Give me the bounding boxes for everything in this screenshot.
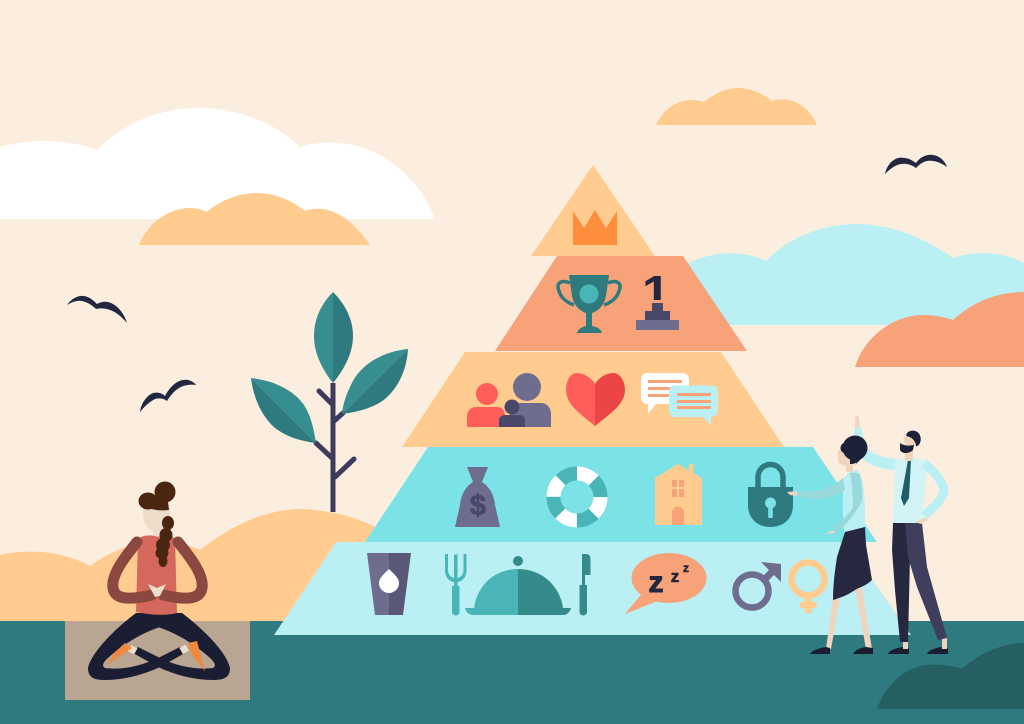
icon: sleep speech bubble xyxy=(625,553,706,614)
plant stem and branches xyxy=(316,383,354,512)
woman feet xyxy=(107,641,205,671)
icon: cloche xyxy=(465,556,571,615)
man hand on hip xyxy=(915,517,928,524)
woman back hand xyxy=(825,530,835,534)
icon: glass of water xyxy=(367,553,411,615)
woman torso xyxy=(843,470,865,535)
man raised hand xyxy=(855,416,860,428)
woman head xyxy=(838,436,868,472)
icon: crown xyxy=(573,210,617,245)
woman legs xyxy=(826,588,872,649)
bird: top right xyxy=(885,155,947,174)
woman torso xyxy=(136,535,177,615)
icon: fork xyxy=(445,554,466,616)
icon: padlock xyxy=(748,464,793,527)
woman neck and face xyxy=(143,505,170,538)
icon: trophy xyxy=(558,275,620,333)
bird: left upper xyxy=(67,296,127,323)
man right arm xyxy=(924,463,944,516)
icon: first place podium xyxy=(636,276,679,330)
pyramid xyxy=(274,165,911,635)
right leaf xyxy=(342,349,408,414)
icon: female symbol xyxy=(792,562,824,613)
cloud: light blue xyxy=(680,224,1024,325)
icon: heart xyxy=(566,373,625,426)
top leaf xyxy=(314,292,353,383)
man ankles xyxy=(903,638,947,649)
icon: sleep speech bubble: z xyxy=(683,561,689,575)
icon: money bag xyxy=(455,467,500,527)
bird: left lower xyxy=(140,380,196,412)
woman hands xyxy=(148,584,166,597)
left leaf xyxy=(251,378,316,443)
icon: knife xyxy=(580,554,590,616)
woman forward hand xyxy=(787,491,797,496)
bush: dark teal xyxy=(877,643,1024,709)
man figure xyxy=(854,416,948,654)
icon: family group xyxy=(467,373,551,427)
woman hair xyxy=(138,482,176,567)
level 3 xyxy=(402,352,784,447)
icon: sleep speech bubble: z xyxy=(648,566,664,599)
icon: house xyxy=(655,464,702,525)
woman forward arm xyxy=(797,478,845,499)
man tie xyxy=(901,460,911,506)
cloud: large white xyxy=(0,108,435,219)
man raised arm xyxy=(854,427,897,470)
man trousers xyxy=(892,523,947,642)
woman legs xyxy=(88,613,230,680)
level 5: bottom xyxy=(274,542,911,635)
woman arms xyxy=(113,542,202,598)
woman figure xyxy=(787,436,873,654)
icon: money bag: $ xyxy=(470,490,486,522)
man head xyxy=(900,431,921,461)
icon: life ring xyxy=(554,474,600,520)
cloud: orange right xyxy=(855,292,1024,367)
icon: sleep speech bubble: z xyxy=(671,567,679,586)
level 1: top xyxy=(531,165,655,256)
cloud: peach top right xyxy=(656,88,817,125)
meditating woman xyxy=(88,482,230,680)
woman skirt xyxy=(833,527,872,600)
woman back arm xyxy=(833,473,862,532)
sand hills xyxy=(0,509,425,621)
ground xyxy=(0,621,1024,724)
mat xyxy=(65,621,250,700)
numeral one: 1 xyxy=(642,267,670,318)
woman shoes xyxy=(810,647,873,654)
man shoes xyxy=(888,647,948,654)
man torso xyxy=(893,456,927,523)
level 2 xyxy=(495,256,747,351)
icon: male symbol xyxy=(736,562,781,608)
icon: chat bubbles xyxy=(641,373,718,425)
cloud: peach left xyxy=(139,193,370,245)
level 4 xyxy=(365,447,877,542)
plant xyxy=(251,292,408,512)
